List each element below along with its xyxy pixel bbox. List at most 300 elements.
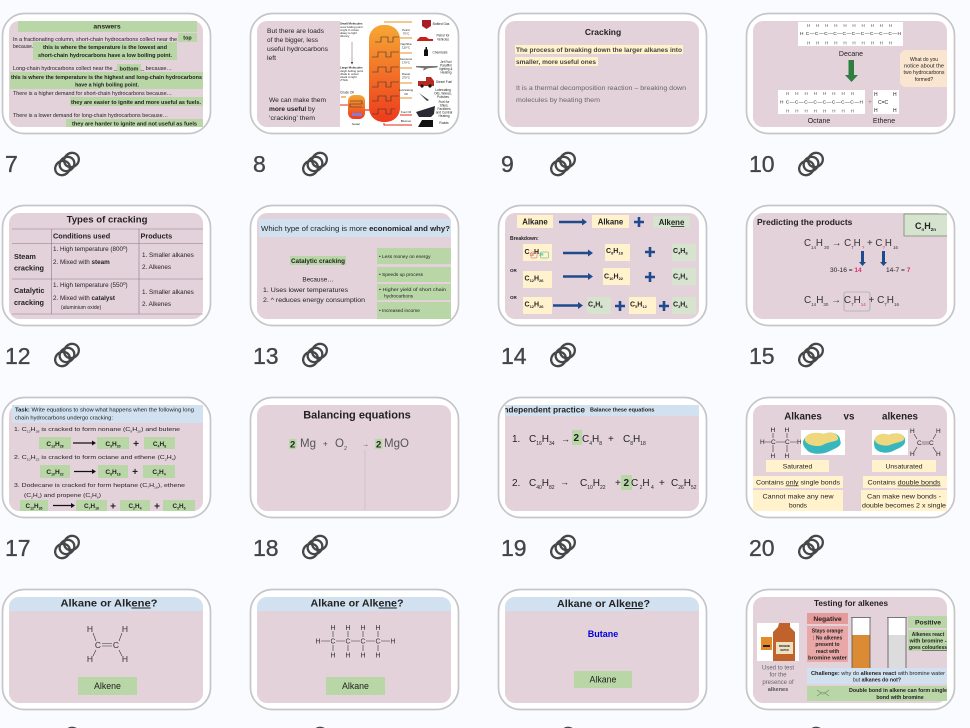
slide numbers [5,151,775,561]
headings: alkenes [882,412,919,422]
products and uses: Fuel for [439,100,450,104]
question 3: 4 [140,506,142,510]
answer bar: bond with bromine [876,695,924,701]
question 3: H [135,503,140,510]
heater: heater [352,122,360,126]
slide 17: writing equations task [2,398,210,518]
ethene structure: H [87,624,93,634]
ethene structure: H [893,92,897,98]
question 1: + [133,439,139,450]
question 1: H [31,427,36,433]
breakdown row 3: H [534,302,539,308]
question 3 with answers: they are easier to ignite and more useful as fuels. [71,100,201,106]
question 3: 7 [89,506,91,510]
equation 2: C [631,478,638,489]
ethene structure: C [95,640,101,650]
butane structure: H [330,625,336,632]
breakdown row 2: C [673,274,678,280]
equation 2: 82 [549,485,555,491]
table: cracking [14,264,44,272]
bottle caption: presence of [762,680,794,686]
question 2: 22 [36,458,40,462]
molecule size notes: Small Molecules [340,22,363,26]
bromine water bottle: WATER [780,649,789,652]
ethene structure: H [122,624,128,634]
heading bar: Alkane or Alk ene? [310,598,404,610]
general formula box: H [924,221,931,231]
ethane structure [760,427,802,460]
answer: Alkane [342,681,369,691]
breakdown row 3: C [524,302,530,308]
products and uses: and Central [436,110,453,114]
prompt word: Butane [588,629,618,639]
ethene structure [87,624,128,664]
ethene structure [910,428,941,458]
ethane structure: C [771,439,776,446]
molecule size notes: •Runny [340,34,350,38]
thermal decomposition text: molecules by heating them [516,97,600,104]
completed equation: 14 [861,302,866,307]
table: 2. Alkenes [142,264,171,271]
saturated sponge [801,430,845,455]
completed equation: 30 [823,302,829,307]
breakdown row 1: C [673,248,678,255]
breakdown row 2: C [604,274,609,280]
breakdown row 1: H [534,249,539,256]
breakdown row 2: 26 [539,278,544,283]
breakdown row 3 [510,295,696,314]
octane structure: H H H H H H H H [786,108,854,114]
text: make them more useful [269,97,326,122]
completed equation: 7 [851,302,854,307]
breakdown row 3: 4 [593,304,596,309]
answer [326,677,385,695]
question 1: H [112,441,117,448]
question 1: C [46,441,51,448]
negative result [807,613,848,662]
butane structure: H [375,625,381,632]
slide 18: balancing equations [250,398,458,518]
butane structure: H [345,652,351,660]
butane structure: H [360,652,366,660]
decane structure: H H H H H H H H H H [807,23,892,28]
ethene structure: H [874,108,878,114]
equation with unknowns: H [854,238,861,249]
products and uses: Chemicals [433,50,448,54]
question 1 with answers: because. [13,44,33,50]
butane structure: H [330,652,336,660]
ethane structure: H [797,439,802,446]
question 2: 10 [27,458,31,462]
molecule size notes: •Hard to light [340,75,357,79]
decane structure [798,22,903,46]
slide numbers: 9 [501,151,514,177]
equation 2: + [659,478,665,489]
question 3: + [110,502,116,512]
ethene structure: C [929,440,934,447]
text: bigger hydrocarbons left: useful hydrocarbons [267,46,329,53]
equation 2: C [529,478,536,489]
question 3: C [128,503,133,510]
equation 1: H [633,434,640,445]
table [12,229,203,314]
question 2: 18 [117,472,121,476]
octane and ethene labels: Octane [808,118,830,125]
equation 2: H [642,478,650,489]
molecule size notes: Crude Oil [340,90,354,94]
heading bar [257,597,451,611]
butane structure: H [345,625,351,632]
question 3: H [34,503,39,510]
text: bigger hydrocarbons left: left [267,55,276,62]
saturated and unsaturated labels: Unsaturated [885,464,923,470]
completed equation: 7 [884,302,887,307]
question 2: H [31,455,36,461]
molecule size notes: •Light in colour [340,28,359,32]
question 3: 12 [30,506,34,510]
fraction labels [399,28,413,123]
ethene structure: H [122,654,128,664]
products and uses [416,20,453,127]
question 2 [14,455,176,478]
reasons [263,276,365,304]
slide numbers: 18 [253,535,279,561]
molecule size notes: •High boiling point [340,69,363,73]
question 1: 28 [36,430,40,434]
ethene structure: C=C [878,100,889,106]
highlighted definition: smaller, more useful ones [516,59,596,66]
question 2: 10 [51,472,55,476]
fraction labels: Bitumen [401,119,412,123]
question 2: H [159,469,164,476]
table: 2. Mixed with catalyst [53,295,116,302]
question 3: 3 [90,496,93,500]
question 1: 1. C [14,427,24,433]
equation 2: H [684,478,691,489]
slide numbers: 20 [749,535,775,561]
question 3 with answers [13,91,203,106]
table: 1. Smaller alkanes [142,252,194,259]
breakdown row 2: 4 [685,276,688,281]
positive result: with bromine - [908,638,947,644]
completed equation: → C [828,295,851,306]
calculations [830,267,911,274]
bottle caption: alkenes [768,687,788,693]
equation 2: C [671,478,678,489]
question 1: 28 [60,444,64,448]
equation 2: + [615,478,621,489]
question 1: 9 [130,430,133,434]
ethane structure: H [784,427,790,434]
question 3 with answers: There is a higher demand for short-chain hydrocarbons because… [13,91,172,97]
fraction labels: Kerosene [400,57,413,61]
question 3: 2 [133,506,135,510]
test tube orange [851,618,871,668]
equation 1: 34 [549,441,555,447]
calculations: 14-7 = 7 [886,267,911,274]
butane structure: C [330,638,336,646]
equation 1: 1. [512,434,520,445]
question 2 with answers: bottom [120,66,138,72]
word equation: Alkane [522,218,548,226]
bromine water bottle: BROMINE [779,645,791,648]
heading bar [501,405,699,416]
benefit boxes: • Less money on energy [379,254,431,260]
table: 1. Smaller alkanes [142,289,194,296]
bond descriptions: Cannot make any new [762,494,834,500]
ethene structure: H [87,654,93,664]
butane structure: H [315,638,321,646]
butane structure: C [345,638,351,646]
slide numbers: 8 [253,151,266,177]
general formula box: n [922,227,924,232]
question 1: H [55,441,60,448]
ethene structure: H [893,108,897,114]
reasons: Because… [302,276,334,284]
thermal decomposition text: It is a thermal decomposition reaction – breaking down [516,85,686,92]
products and uses: Polishes [437,95,449,99]
heading bar: Balance these equations [590,408,654,414]
breakdown row 1: 8 [611,250,614,256]
bottle caption: for the [769,672,787,678]
question 1: 9 [110,444,112,448]
slide numbers: 12 [5,343,31,369]
answer bar [807,686,947,701]
molecule size notes [340,22,363,97]
equation with unknowns: H [816,238,823,249]
saturated and unsaturated labels [766,460,936,472]
callout question: notice about the [904,64,944,70]
question 2 with answers: this is where the temperature is the highest and long-chain hydrocarbons [11,75,202,81]
headings: vs [844,412,855,422]
equation: MgO [384,438,409,450]
slide 14: alkane breakdown [498,206,706,326]
table: (aluminium oxide) [61,305,102,311]
products and uses: Bottled Gas [433,22,450,26]
heading: Cracking [585,27,621,37]
equation 2 [512,475,697,491]
breakdown row 2: 22 [619,276,624,281]
positive result: Alkenes react [912,632,945,638]
text: make them more useful: more useful by [269,106,316,113]
word equation: Alkene [659,218,685,227]
table: 2. Mixed with steam [53,259,110,266]
breakdown row 1: C [524,249,530,256]
table: Steam [14,252,36,261]
completed equation: C [804,295,811,306]
products and uses: Lubricating [435,88,451,92]
slide 15: predicting the products [746,206,954,326]
fraction labels: 70°C [403,32,409,36]
challenge bar: Challenge: why do alkenes react with bromine water [811,671,945,677]
equation 1: 4 [589,441,592,447]
benefit boxes [377,248,451,319]
task bar: Task: Write equations to show what happens when the following long [15,408,194,414]
table: 1. High temperature (550⁰) [53,282,128,289]
bromine water bottle [757,623,799,661]
equation 2: 52 [691,485,697,491]
breakdown row 2 [510,268,696,288]
equation 2: 40 [536,485,542,491]
slide numbers: 15 [749,343,775,369]
fraction labels: Diesel [402,72,410,76]
text: bigger hydrocarbons left [267,28,329,62]
word equation: Alkane [598,218,624,226]
saturated and unsaturated labels: Saturated [783,464,812,470]
equation 1: 2 [574,433,580,444]
breakdown row 2: H [614,274,619,280]
question 2: 4 [164,472,166,476]
fraction labels: 120°C [402,46,410,50]
ethene structure [873,90,899,114]
equation with unknowns: ? [861,245,865,250]
question 4 with answers [13,113,203,128]
question 2 with answers: Long-chain hydrocarbons collect near the _ [13,66,118,72]
question 3: H [179,503,184,510]
slide numbers: 10 [749,151,775,177]
equation 1: 8 [599,441,602,447]
breakdown row 1: 26 [539,252,544,256]
ethane structure: H [760,439,765,446]
plus: + [868,100,872,106]
equation: 2 [290,440,295,450]
slide 8: fractional distillation [250,14,458,134]
equation: O [335,438,344,450]
products and uses: Diesel Fuel [436,80,452,84]
question 3: 6 [97,496,99,500]
fraction labels: 170°C [402,60,410,64]
heading: Types of cracking [67,214,148,226]
completed equation: + C [866,295,884,306]
breakdown row 3: C [588,302,593,308]
question 3: ), ethene [158,483,185,489]
slide 9: cracking definition [498,14,706,134]
equation [289,438,409,510]
breakdown row 2: 2 [678,276,681,281]
equation 2: 2 [624,478,630,489]
heading: Predicting the products [757,217,853,227]
completed equation: H [816,295,823,306]
reasons: 2. ^ reduces energy consumption [263,297,365,304]
fraction labels: Oil [404,92,408,96]
question 1 with answers: top [183,36,192,42]
question 1 [14,427,180,450]
ethane structure: H [770,453,776,460]
butane structure [315,625,396,660]
question 2: C [46,469,51,476]
slide 24: testing for alkenes [746,590,954,710]
equation 1: + [608,434,614,445]
question 3: 7 [147,486,150,490]
answers heading: answers [93,24,121,30]
slide 21: ethene question [2,590,210,710]
octane structure: H C—C—C—C—C—C—C—C—H [780,100,864,106]
equation: Mg [300,438,316,450]
equation 2: 2. [512,478,520,489]
molecule size notes: •Thick [340,78,348,82]
products and uses: lighting & [439,67,453,71]
question 3: H [92,493,97,499]
heading bar: Independent practice [501,406,586,414]
table: 2. Alkenes [142,301,171,308]
question 1: is cracked to form nonane (C [39,427,130,433]
question 1: H [160,441,164,448]
question 3: C [84,503,89,510]
question 2 with answers [10,64,203,89]
equation 1: H [592,434,599,445]
question 1: C [153,441,158,448]
heading bar [505,597,699,611]
question 2: + [132,467,138,478]
negative result: Stays orange [812,628,843,634]
table: Conditions used [53,232,110,240]
ethene structure: H [910,428,915,435]
slide 12: types of cracking [2,206,210,326]
question 3 [14,483,195,512]
highlighted definition [515,45,683,66]
breakdown label: Breakdown: [510,236,539,242]
completed equation: H [887,295,894,306]
ethane structure: C [785,439,790,446]
question 3: C [172,503,177,510]
answer highlight: Catalytic cracking [291,259,345,265]
question 2: H [55,469,60,476]
ethane structure: H [784,453,790,460]
heater [340,95,370,126]
callout question: formed? [915,77,933,83]
equation with unknowns [804,238,898,250]
equation 2: 10 [587,485,593,491]
question 3: 26 [39,506,43,510]
equation: → [362,442,369,448]
ethene structure: H [874,92,878,98]
bond descriptions: Contains double bonds [868,480,941,486]
heading bar: Alkane or Alkene? [557,598,650,610]
breakdown row 2: C [524,276,530,282]
breakdown row 2: OR [510,268,518,273]
negative result: bromine water [808,656,847,662]
bond descriptions: Can make new bonds - [867,494,941,500]
heading: Balancing equations [303,410,411,422]
equation 2: 2 [638,485,643,491]
breakdown row 1: 4 [678,250,681,256]
equation with unknowns: 16 [892,245,898,250]
butane structure: H [390,638,396,646]
fraction labels: Petrol [402,28,410,32]
question 3: 3 [177,506,179,510]
equation: 2 [344,446,347,452]
breakdown row 3: 5 [635,304,638,309]
answer: Alkane [590,674,617,684]
equation 2: C [580,478,587,489]
breakdown row 2: H [680,274,685,280]
breakdown row 2: 12 [530,278,535,283]
arrows down [859,251,887,266]
challenge bar: but alkanes do not? [853,678,901,684]
slide 13: economical cracking [250,206,458,326]
heading bar: Alkane or Alk ene? [60,598,158,610]
slide 22: butane structure question [250,590,458,710]
answer highlight [290,256,346,265]
link ring icons [52,150,826,728]
text: make them more useful: ‘cracking’ them [269,115,315,122]
question 2: H [112,469,117,476]
octane and ethene labels: Ethene [873,118,895,125]
question 3: 4 [38,496,40,500]
question 1: 13 [51,444,55,448]
general formula box [904,214,947,236]
question 2: is cracked to form octane and ethene (C [39,455,165,461]
